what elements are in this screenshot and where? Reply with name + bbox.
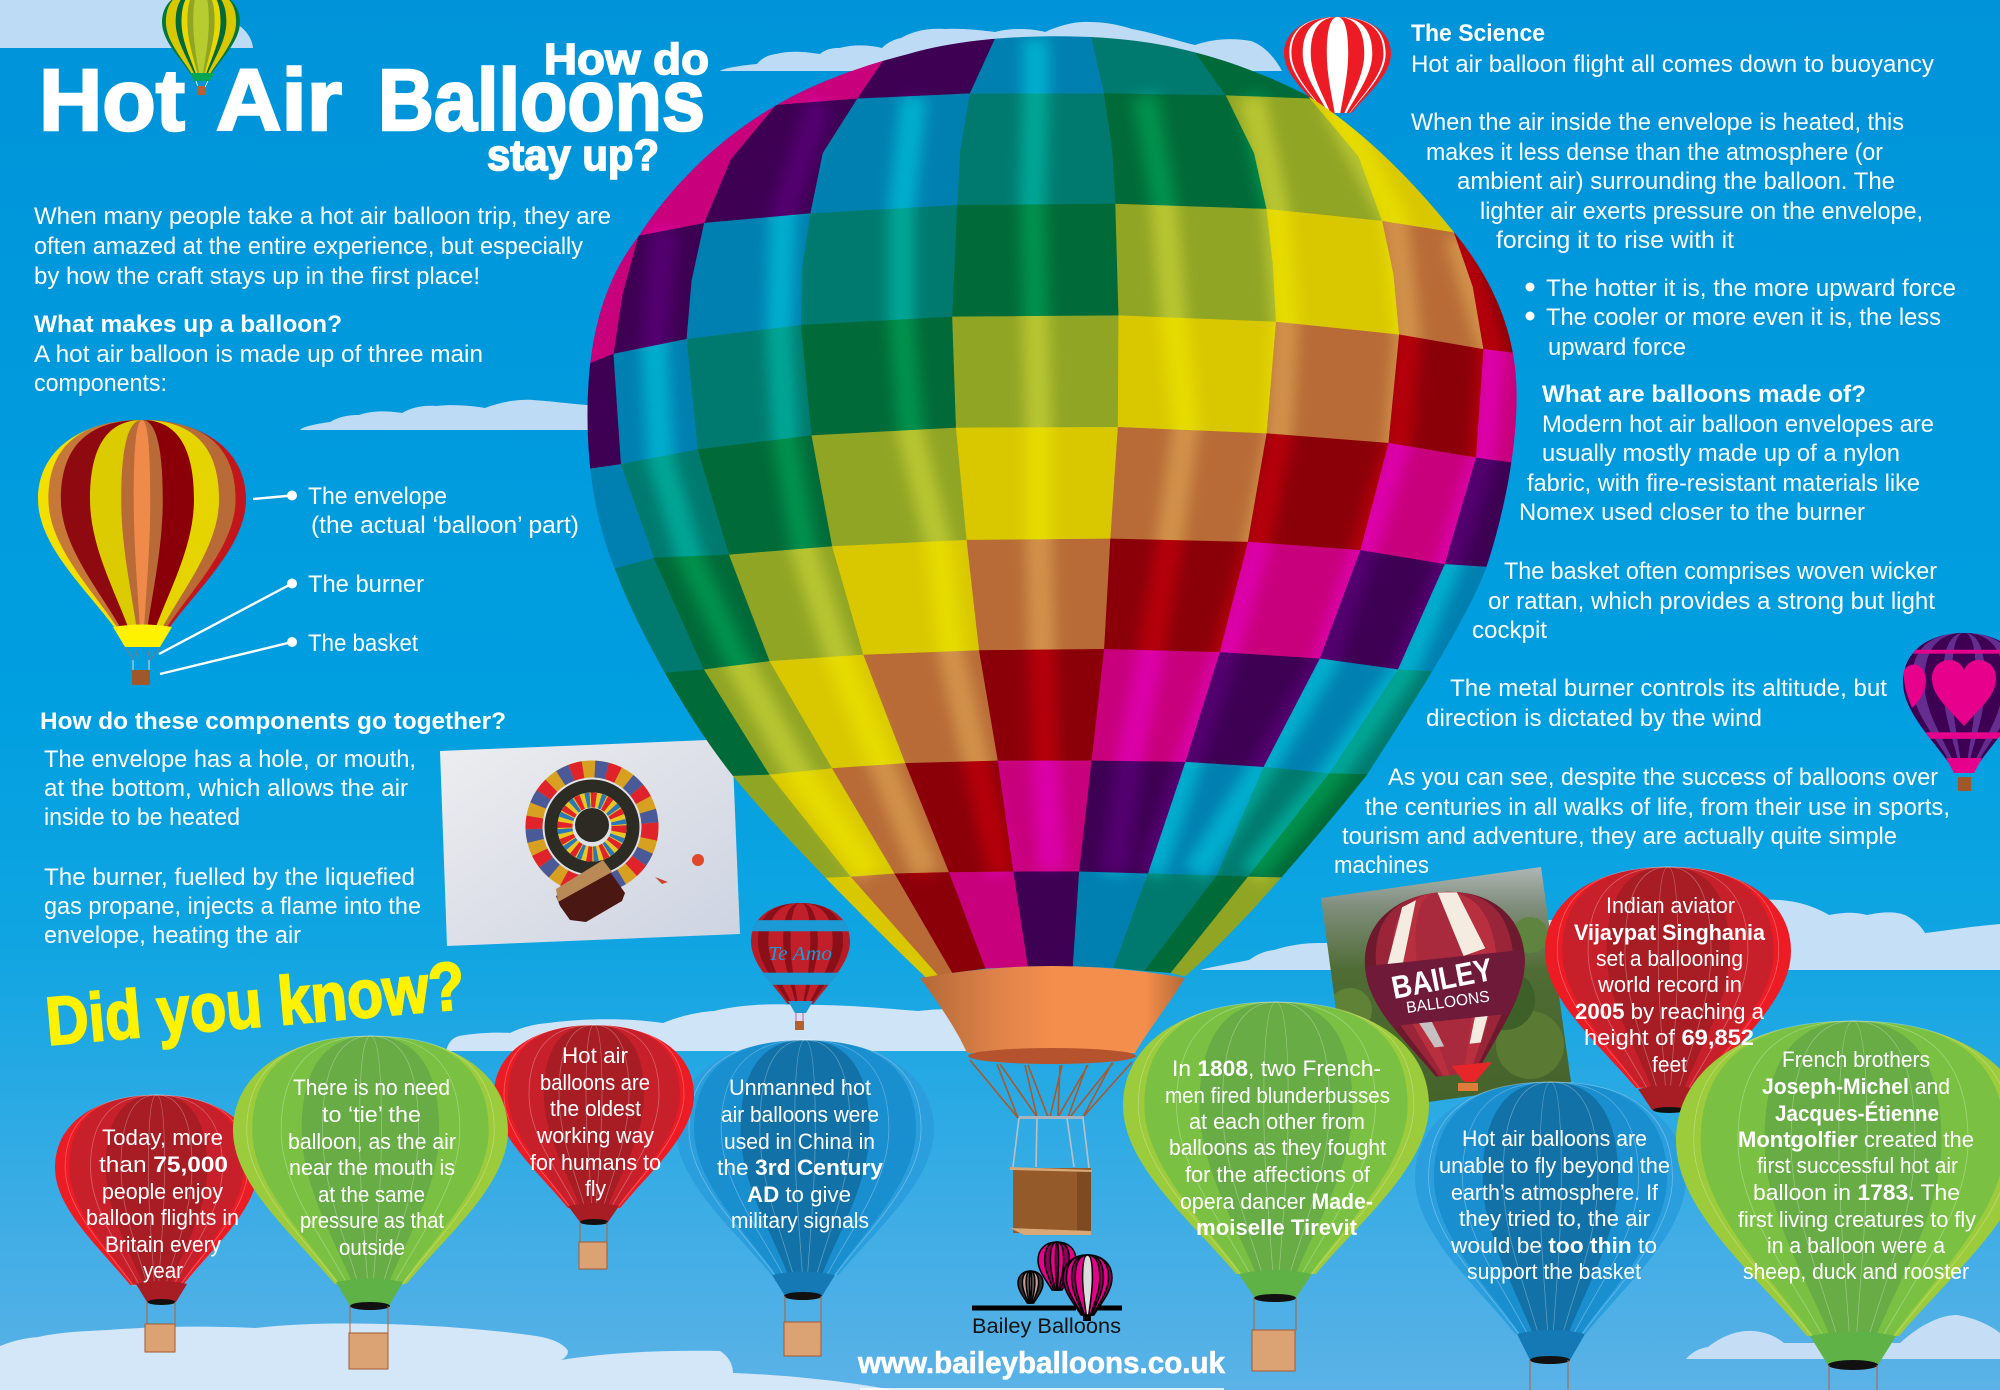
- what are balloons made of text: fabric, with fire-resistant materials like: [1527, 470, 1920, 497]
- fact balloon: 75,000 people: Britain every: [105, 1232, 221, 1257]
- photo: bailey balloon: BALLOONS: [1405, 988, 1491, 1017]
- small green and yellow balloon behind title: [162, 0, 240, 95]
- fact balloon: oldest working way to fly: [494, 1025, 694, 1269]
- envelope: [38, 420, 246, 628]
- main chequered balloon envelope: [564, 26, 1532, 982]
- conclusion text: [1334, 764, 1950, 879]
- fact balloon: oldest working way to fly: for humans to: [530, 1150, 661, 1175]
- intro text: [34, 203, 611, 290]
- title: [39, 35, 709, 180]
- fact balloon: montgolfier brothers: Montgolfier created the: [1738, 1127, 1974, 1152]
- how components go together text: The envelope has a hole, or mouth,: [44, 746, 416, 773]
- fact balloon: too thin: they tried to, the air: [1459, 1206, 1650, 1231]
- fact balloon: no need to tie: [233, 1036, 508, 1369]
- basket and burner text: or rattan, which provides a strong but light: [1488, 588, 1935, 615]
- fact balloon: oldest working way to fly: the oldest: [550, 1096, 641, 1121]
- fact balloon: montgolfier brothers: Jacques-Étienne: [1775, 1101, 1939, 1126]
- purple heart balloon: [1903, 633, 2000, 791]
- basket: [1010, 1167, 1092, 1235]
- how components go together text: gas propane, injects a flame into the: [44, 893, 421, 920]
- row 7: [645, 670, 770, 777]
- text: vijaypat singhania fact: height of 69,852: [1584, 1025, 1754, 1050]
- fact balloon: 75,000 people: year: [143, 1258, 183, 1283]
- fact balloon: blunderbusses: balloons as they fought: [1169, 1135, 1386, 1160]
- fact balloon: oldest working way to fly: balloons are: [540, 1070, 650, 1095]
- part labels with connector lines: The basket: [308, 630, 418, 657]
- what are balloons made of text: usually mostly made up of a nylon: [1542, 440, 1900, 467]
- how components go together text: inside to be heated: [44, 804, 240, 831]
- text: vijaypat singhania fact: Vijaypat Singhania: [1574, 920, 1766, 945]
- basket and burner text: The metal burner controls its altitude, but: [1450, 675, 1887, 702]
- conclusion text: machines: [1334, 852, 1429, 879]
- basket and burner text: direction is dictated by the wind: [1426, 705, 1762, 732]
- science text: makes it less dense than the atmosphere (or: [1426, 139, 1883, 166]
- fact balloon: montgolfier brothers: Joseph-Michel and: [1762, 1074, 1950, 1099]
- row 3: [564, 236, 639, 364]
- fact balloon: montgolfier brothers: [1676, 1021, 2000, 1390]
- row 2: [608, 77, 776, 242]
- photo: balloon from below: [440, 739, 740, 946]
- science text: When the air inside the envelope is heated, this: [1411, 109, 1904, 136]
- fact balloon: blunderbusses: opera dancer Made-: [1180, 1189, 1373, 1214]
- what are balloons made of text: [1519, 381, 1934, 526]
- fact balloon: montgolfier brothers: first living creatures to fly: [1738, 1207, 1976, 1232]
- fact balloon: no need to tie: to ‘tie’ the: [322, 1102, 421, 1127]
- fact balloon: montgolfier brothers: balloon in 1783. The: [1753, 1180, 1960, 1205]
- science text: ambient air) surrounding the balloon. The: [1457, 168, 1895, 195]
- fact balloon: unmanned hot air balloons: used in China in: [724, 1129, 875, 1154]
- photo: bailey balloon: [1321, 867, 1571, 1113]
- bailey balloons logo: Bailey Balloons: [972, 1315, 1121, 1338]
- fact balloon: no need to tie: near the mouth is: [289, 1155, 455, 1180]
- fact balloon envelope: vijaypat singhania: [1545, 867, 1791, 1113]
- what are balloons made of text: Nomex used closer to the burner: [1519, 499, 1865, 526]
- how components go together text: [40, 708, 506, 949]
- part labels with connector lines: [159, 483, 579, 674]
- fact balloon: no need to tie: There is no need: [293, 1075, 450, 1100]
- fact balloon: blunderbusses: In 1808, two French-: [1172, 1056, 1381, 1081]
- text: vijaypat singhania fact: [1574, 893, 1766, 1077]
- fact balloon: no need to tie: pressure as that: [300, 1208, 444, 1233]
- title: Air: [216, 52, 342, 149]
- fact balloon: oldest working way to fly: Hot air: [562, 1043, 628, 1068]
- website address: www.baileyballoons.co.uk: [857, 1345, 1226, 1380]
- fact balloon: oldest working way to fly: fly: [585, 1176, 606, 1201]
- conclusion text: the centuries in all walks of life, from their use in sports,: [1365, 794, 1950, 821]
- how components go together text: envelope, heating the air: [44, 922, 301, 949]
- science text: lighter air exerts pressure on the envelope,: [1480, 198, 1923, 225]
- te amo balloon: Te Amo: [768, 943, 832, 965]
- text: vijaypat singhania fact: world record in: [1597, 972, 1742, 997]
- fact balloon: no need to tie: at the same: [318, 1182, 425, 1207]
- fact balloon: montgolfier brothers: sheep, duck and rooster: [1743, 1259, 1969, 1284]
- row 4: [564, 354, 621, 472]
- fact balloon: 75,000 people: balloon flights in: [86, 1205, 239, 1230]
- conclusion text: tourism and adventure, they are actually quite simple: [1342, 823, 1897, 850]
- title: Balloons: [378, 52, 705, 149]
- how components go together text: The burner, fuelled by the liquefied: [44, 864, 415, 891]
- heading and text: what makes up a balloon: components:: [34, 370, 167, 397]
- basket: [132, 660, 150, 685]
- main balloon skirt: [920, 966, 1185, 1053]
- basket and burner text: cockpit: [1472, 617, 1547, 644]
- title: How do: [544, 35, 709, 84]
- row 9: [804, 877, 939, 982]
- row 5: [570, 464, 654, 574]
- fact balloon: blunderbusses: men fired blunderbusses: [1165, 1083, 1390, 1108]
- fact balloon: too thin: earth’s atmosphere. If: [1451, 1180, 1659, 1205]
- heading and text: what makes up a balloon: What makes up a balloon?: [34, 311, 342, 338]
- science text: The Science: [1411, 20, 1545, 47]
- how components go together text: How do these components go together?: [40, 708, 506, 735]
- science text: forcing it to rise with it: [1496, 227, 1734, 254]
- photo: bailey balloon: BAILEY: [1388, 951, 1495, 1006]
- fact balloon: no need to tie: outside: [339, 1235, 405, 1260]
- fact balloon: too thin: [1415, 1082, 1686, 1390]
- panel highlights: [654, 38, 1492, 874]
- fact balloon: too thin: support the basket: [1467, 1259, 1641, 1284]
- fact balloon: blunderbusses: for the affections of: [1185, 1162, 1371, 1187]
- intro text: When many people take a hot air balloon trip, they are: [34, 203, 611, 230]
- row 1: [776, 60, 884, 106]
- part labels with connector lines: (the actual ‘balloon’ part): [311, 512, 579, 539]
- basket and burner text: [1426, 558, 1937, 732]
- fact balloon: too thin: Hot air balloons are: [1462, 1126, 1647, 1151]
- bullet list: [1526, 275, 1956, 361]
- how components go together text: at the bottom, which allows the air: [44, 775, 408, 802]
- fact balloon: oldest working way to fly: working way: [536, 1123, 654, 1148]
- text: vijaypat singhania fact: feet: [1652, 1052, 1687, 1077]
- fact balloon: montgolfier brothers: in a balloon were a: [1767, 1233, 1946, 1258]
- fact balloon: too thin: unable to fly beyond the: [1439, 1153, 1670, 1178]
- fact balloon: unmanned hot air balloons: air balloons were: [721, 1102, 879, 1127]
- what are balloons made of text: Modern hot air balloon envelopes are: [1542, 411, 1934, 438]
- fact balloon: montgolfier brothers: first successful hot air: [1757, 1153, 1958, 1178]
- te amo balloon: [751, 903, 850, 1030]
- burner skirt: [113, 624, 172, 647]
- title: Hot: [39, 52, 185, 149]
- fact balloon: blunderbusses: moiselle Tirevit: [1196, 1215, 1358, 1240]
- conclusion text: As you can see, despite the success of balloons over: [1388, 764, 1938, 791]
- title: stay up?: [487, 131, 659, 180]
- fact balloon: unmanned hot air balloons: the 3rd Century: [717, 1155, 884, 1180]
- fact balloon: 75,000 people: [55, 1095, 258, 1352]
- basket and burner text: The basket often comprises woven wicker: [1504, 558, 1937, 585]
- fact balloon: montgolfier brothers: French brothers: [1782, 1047, 1930, 1072]
- fact balloon: no need to tie: balloon, as the air: [288, 1129, 456, 1154]
- intro text: by how the craft stays up in the first place!: [34, 263, 480, 290]
- fact balloon: blunderbusses: [1123, 1002, 1429, 1371]
- row 8: [714, 775, 851, 879]
- heading and text: what makes up a balloon: [34, 311, 483, 397]
- bullet list: The hotter it is, the more upward force: [1546, 275, 1956, 302]
- fact balloon: unmanned hot air balloons: military signals: [731, 1208, 869, 1233]
- part labels with connector lines: The burner: [308, 571, 424, 598]
- fact balloon: unmanned hot air balloons: [676, 1040, 934, 1356]
- fact balloon: 75,000 people: Today, more: [102, 1125, 223, 1150]
- text: vijaypat singhania fact: Indian aviator: [1606, 893, 1735, 918]
- bailey balloons logo: [972, 1242, 1122, 1338]
- fact balloon: 75,000 people: people enjoy: [102, 1179, 223, 1204]
- bullet list: upward force: [1548, 334, 1686, 361]
- main balloon burner, ropes and basket: [968, 1048, 1136, 1235]
- fact balloon: too thin: would be too thin to: [1450, 1233, 1657, 1258]
- fact balloon: unmanned hot air balloons: Unmanned hot: [729, 1075, 871, 1100]
- intro text: often amazed at the entire experience, but especially: [34, 233, 583, 260]
- red and white balloon behind main balloon: [1284, 17, 1391, 113]
- fact balloon: blunderbusses: at each other from: [1189, 1109, 1365, 1134]
- row 6: [595, 558, 704, 675]
- text: vijaypat singhania fact: set a ballooning: [1596, 946, 1743, 971]
- heading and text: what makes up a balloon: A hot air balloon is made up of three main: [34, 341, 483, 368]
- science text: Hot air balloon flight all comes down to buoyancy: [1411, 51, 1934, 78]
- fact balloon: 75,000 people: than 75,000: [99, 1152, 228, 1177]
- science text: [1411, 20, 1934, 254]
- fact balloon: unmanned hot air balloons: AD to give: [747, 1182, 851, 1207]
- part labels with connector lines: The envelope: [308, 483, 447, 510]
- text: vijaypat singhania fact: 2005 by reaching a: [1575, 999, 1765, 1024]
- did you know heading: Did you know?: [43, 948, 468, 1060]
- what are balloons made of text: What are balloons made of?: [1542, 381, 1866, 408]
- bullet list: The cooler or more even it is, the less: [1546, 304, 1941, 331]
- diagram balloon with parts: [38, 420, 246, 685]
